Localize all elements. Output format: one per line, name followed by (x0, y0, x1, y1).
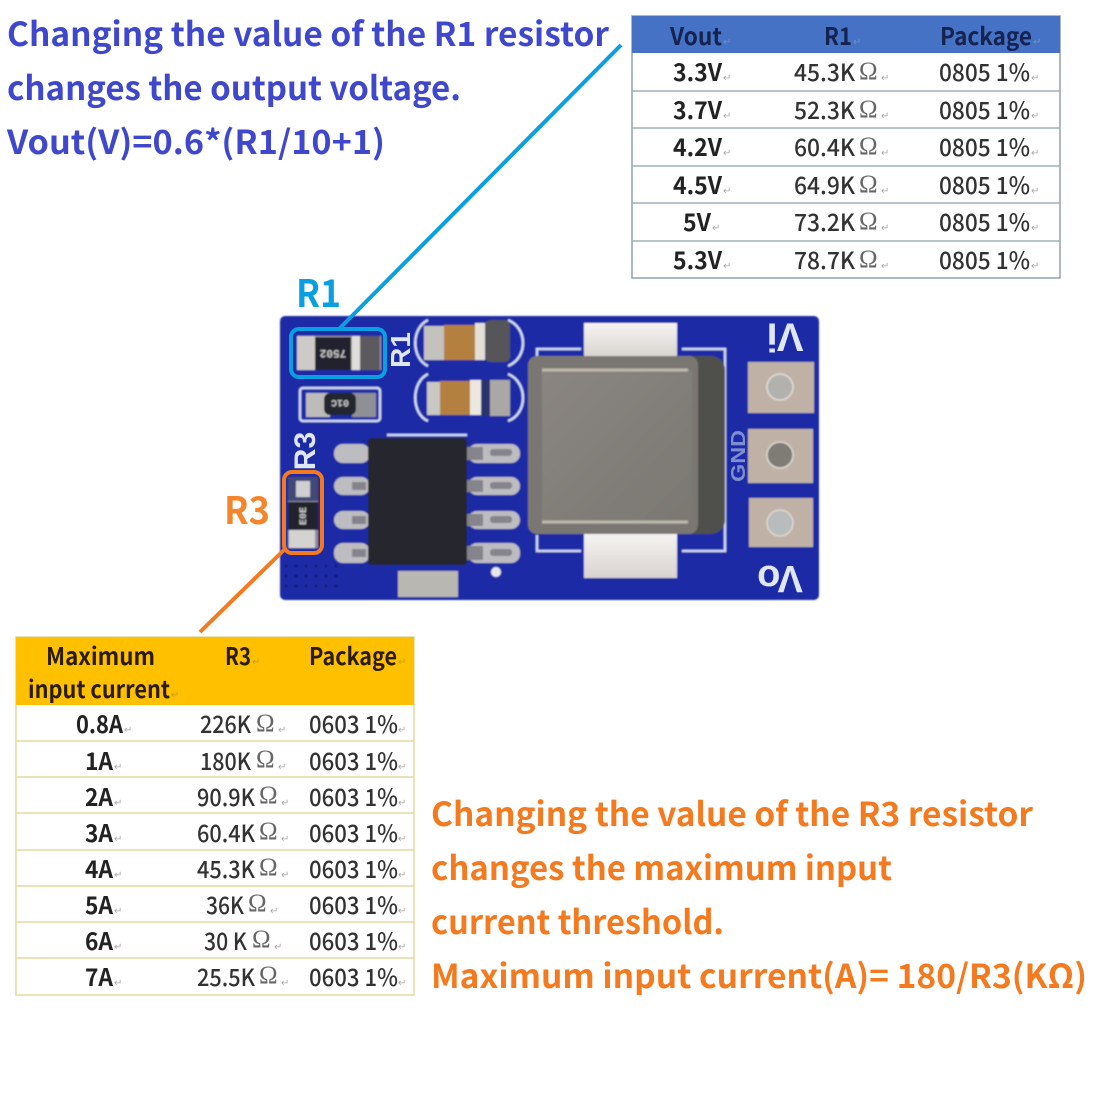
table: Vout and R1 values: Ω (859, 133, 878, 160)
table: Vout and R1 values: ↵ (853, 37, 861, 48)
table: Vout and R1 values: ↵ (723, 111, 731, 122)
table: Vout and R1 values: 3.3V (673, 53, 722, 88)
table: Vout and R1 values (632, 16, 1060, 278)
table: maximum input current and R3 values: ↵ (252, 657, 260, 668)
table: Vout and R1 values: ↵ (881, 261, 889, 272)
table: maximum input current and R3 values: ↵ (398, 870, 406, 881)
table: maximum input current and R3 values: ↵ (278, 762, 286, 773)
table: maximum input current and R3 values: 30 K (204, 922, 247, 957)
table: Vout and R1 values: 78.7K (794, 241, 855, 276)
table: maximum input current and R3 values: 1A (85, 742, 114, 777)
small resistor (306, 393, 376, 417)
table: Vout and R1 values: 5V (683, 203, 711, 238)
R3 highlight box (284, 472, 322, 553)
table: maximum input current and R3 values: Ω (259, 962, 278, 989)
table: maximum input current and R3 values: 0603 1% (309, 814, 398, 849)
table: Vout and R1 values: ↵ (723, 186, 731, 197)
table: maximum input current and R3 values: Ω (259, 782, 278, 809)
table: maximum input current and R3 values: 226K (200, 705, 251, 740)
table: maximum input current and R3 values: 3A (85, 814, 114, 849)
through holes (767, 374, 793, 400)
table: Vout and R1 values: R1 (824, 17, 852, 52)
table: Vout and R1 values: 3.7V (673, 91, 722, 126)
table: Vout and R1 values: 0805 1% (939, 241, 1030, 276)
table: maximum input current and R3 values: Maximum (46, 637, 155, 672)
table: Vout and R1 values: ↵ (881, 73, 889, 84)
table: Vout and R1 values: ↵ (881, 111, 889, 122)
heading: R1 explanation: Vout(V)=0.6*(R1/10+1) (6, 116, 385, 164)
table: maximum input current and R3 values: ↵ (114, 870, 122, 881)
table: Vout and R1 values: Ω (859, 208, 878, 235)
R1 callout arrow line (340, 45, 621, 328)
heading: R3 explanation: changes the maximum input (431, 842, 892, 890)
R3 label: R3 (224, 480, 270, 535)
board (280, 316, 819, 600)
table: maximum input current and R3 values: ↵ (398, 906, 406, 917)
table: Vout and R1 values: ↵ (712, 223, 720, 234)
table: Vout and R1 values: ↵ (723, 261, 731, 272)
table: Vout and R1 values: ↵ (1031, 186, 1039, 197)
bottom IC pad (398, 571, 458, 597)
table: maximum input current and R3 values: 0603 1% (309, 778, 398, 813)
pin shading (352, 447, 512, 560)
table: maximum input current and R3 values: Package (309, 637, 397, 672)
heading: R1 explanation: Changing the value of the R1 resistor (7, 8, 610, 56)
table: maximum input current and R3 values: 0603 1% (309, 742, 398, 777)
table: maximum input current and R3 values: ↵ (114, 834, 122, 845)
table: maximum input current and R3 values: 0603 1% (309, 886, 398, 921)
R3 resistor: E0E (299, 507, 310, 525)
table: Vout and R1 values: ↵ (881, 223, 889, 234)
silk label Vo: Vo (757, 557, 803, 599)
table: Vout and R1 values: ↵ (1031, 148, 1039, 159)
heading: R3 explanation: current threshold. (431, 896, 724, 944)
table: maximum input current and R3 values: ↵ (281, 834, 289, 845)
table: maximum input current and R3 values: ↵ (281, 798, 289, 809)
table: Vout and R1 values: ↵ (881, 148, 889, 159)
table: Vout and R1 values: Vout (669, 17, 722, 52)
silk label R3: R3 (289, 432, 322, 470)
table: Vout and R1 values: Ω (859, 171, 878, 198)
table: maximum input current and R3 values: ↵ (114, 906, 122, 917)
table: maximum input current and R3 values: 90.9K (197, 778, 255, 813)
table: maximum input current and R3 values: Ω (252, 926, 271, 953)
table: Vout and R1 values: 0805 1% (939, 53, 1030, 88)
table: maximum input current and R3 values: Ω (256, 710, 275, 737)
top capacitor (424, 320, 510, 362)
table: Vout and R1 values: 45.3K (794, 53, 855, 88)
table: maximum input current and R3 values: 36K (206, 886, 244, 921)
table: maximum input current and R3 values: ↵ (278, 725, 286, 736)
table: maximum input current and R3 values: ↵ (114, 978, 122, 989)
table: maximum input current and R3 values: 4A (85, 850, 114, 885)
table: maximum input current and R3 values: input current (28, 670, 170, 705)
table: maximum input current and R3 values: 0603 1% (309, 922, 398, 957)
table: maximum input current and R3 values: ↵ (398, 762, 406, 773)
table: maximum input current and R3 values: ↵ (398, 978, 406, 989)
table: maximum input current and R3 values: Ω (259, 854, 278, 881)
inductor body (672, 356, 725, 534)
table: maximum input current and R3 values: 60.4K (197, 814, 255, 849)
table: maximum input current and R3 values: ↵ (270, 906, 278, 917)
table: maximum input current and R3 values: ↵ (171, 690, 179, 701)
table: Vout and R1 values: ↵ (723, 148, 731, 159)
table: maximum input current and R3 values: ↵ (398, 834, 406, 845)
heading: R3 explanation (431, 788, 1087, 998)
IC pins (334, 444, 520, 563)
table: Vout and R1 values: 5.3V (673, 241, 722, 276)
R3 callout arrow line (200, 549, 285, 632)
small resistor: 01C (331, 396, 349, 407)
table: Vout and R1 values: ↵ (723, 37, 731, 48)
table: maximum input current and R3 values: 25.5K (197, 958, 255, 993)
table: maximum input current and R3 values: ↵ (398, 657, 406, 668)
table: maximum input current and R3 values: 0603 1% (309, 705, 398, 740)
table: maximum input current and R3 values (16, 637, 414, 995)
table: maximum input current and R3 values: 2A (85, 778, 114, 813)
table: maximum input current and R3 values: 180K (200, 742, 251, 777)
table: Vout and R1 values: 4.2V (673, 128, 722, 163)
table: maximum input current and R3 values: ↵ (124, 725, 132, 736)
table: Vout and R1 values: 4.5V (673, 166, 722, 201)
table: maximum input current and R3 values: 5A (85, 886, 114, 921)
table: maximum input current and R3 values: ↵ (274, 942, 282, 953)
R1 label: R1 (296, 263, 341, 318)
table: Vout and R1 values: ↵ (1031, 223, 1039, 234)
silk label GND: GND (728, 430, 750, 482)
table: Vout and R1 values: ↵ (1033, 37, 1041, 48)
table: maximum input current and R3 values: 0603 1% (309, 958, 398, 993)
heading: R1 explanation: changes the output voltage. (7, 62, 461, 110)
heading: R3 explanation: Maximum input current(A)= 180/R3(KΩ) (431, 950, 1087, 998)
PCB module photo (280, 314, 819, 600)
table: maximum input current and R3 values: ↵ (398, 725, 406, 736)
table: Vout and R1 values: Ω (859, 96, 878, 123)
table: maximum input current and R3 values: ↵ (398, 798, 406, 809)
heading: R3 explanation: Changing the value of the R3 resistor (431, 788, 1034, 836)
silk label Vi: Vi (766, 314, 804, 358)
table: Vout and R1 values: ↵ (723, 73, 731, 84)
R1 highlight box (291, 329, 385, 377)
table: Vout and R1 values: 52.3K (794, 91, 855, 126)
table: Vout and R1 values: 0805 1% (939, 91, 1030, 126)
R1 resistor (297, 336, 381, 370)
table: maximum input current and R3 values: ↵ (114, 798, 122, 809)
table: Vout and R1 values: Ω (859, 58, 878, 85)
table: maximum input current and R3 values: ↵ (281, 870, 289, 881)
table: Vout and R1 values: 0805 1% (939, 128, 1030, 163)
table: Vout and R1 values: 73.2K (794, 203, 855, 238)
table: maximum input current and R3 values: 7A (85, 958, 114, 993)
table: Vout and R1 values: ↵ (1031, 261, 1039, 272)
table: maximum input current and R3 values: 45.3K (197, 850, 255, 885)
table: Vout and R1 values: Package (940, 17, 1032, 52)
table: maximum input current and R3 values: ↵ (114, 762, 122, 773)
table: maximum input current and R3 values: 6A (85, 922, 114, 957)
IC body (368, 438, 467, 565)
table: maximum input current and R3 values: ↵ (281, 978, 289, 989)
table: Vout and R1 values: ↵ (881, 186, 889, 197)
table: maximum input current and R3 values: Ω (248, 890, 267, 917)
table: Vout and R1 values: ↵ (1031, 111, 1039, 122)
silkscreen outlines (300, 320, 725, 551)
table: Vout and R1 values: 0805 1% (939, 166, 1030, 201)
table: maximum input current and R3 values: 0603 1% (309, 850, 398, 885)
table: maximum input current and R3 values: Ω (259, 818, 278, 845)
silk label R1: R1 (385, 332, 416, 368)
R1 resistor: 7502 (320, 346, 346, 358)
inductor leads (584, 323, 677, 357)
table: Vout and R1 values: 60.4K (794, 128, 855, 163)
lower capacitor (427, 380, 510, 416)
table: Vout and R1 values: ↵ (1031, 73, 1039, 84)
table: maximum input current and R3 values: ↵ (398, 942, 406, 953)
table: Vout and R1 values: Ω (859, 246, 878, 273)
table: maximum input current and R3 values: ↵ (114, 942, 122, 953)
table: Vout and R1 values: 0805 1% (939, 203, 1030, 238)
R3 resistor (288, 477, 318, 548)
table: maximum input current and R3 values: Ω (256, 746, 275, 773)
table: Vout and R1 values: 64.9K (794, 166, 855, 201)
header pads (748, 362, 814, 547)
table: maximum input current and R3 values: R3 (225, 637, 251, 672)
heading: R1 explanation (6, 8, 610, 164)
via dots (284, 564, 338, 588)
table: maximum input current and R3 values: 0.8A (76, 705, 124, 740)
